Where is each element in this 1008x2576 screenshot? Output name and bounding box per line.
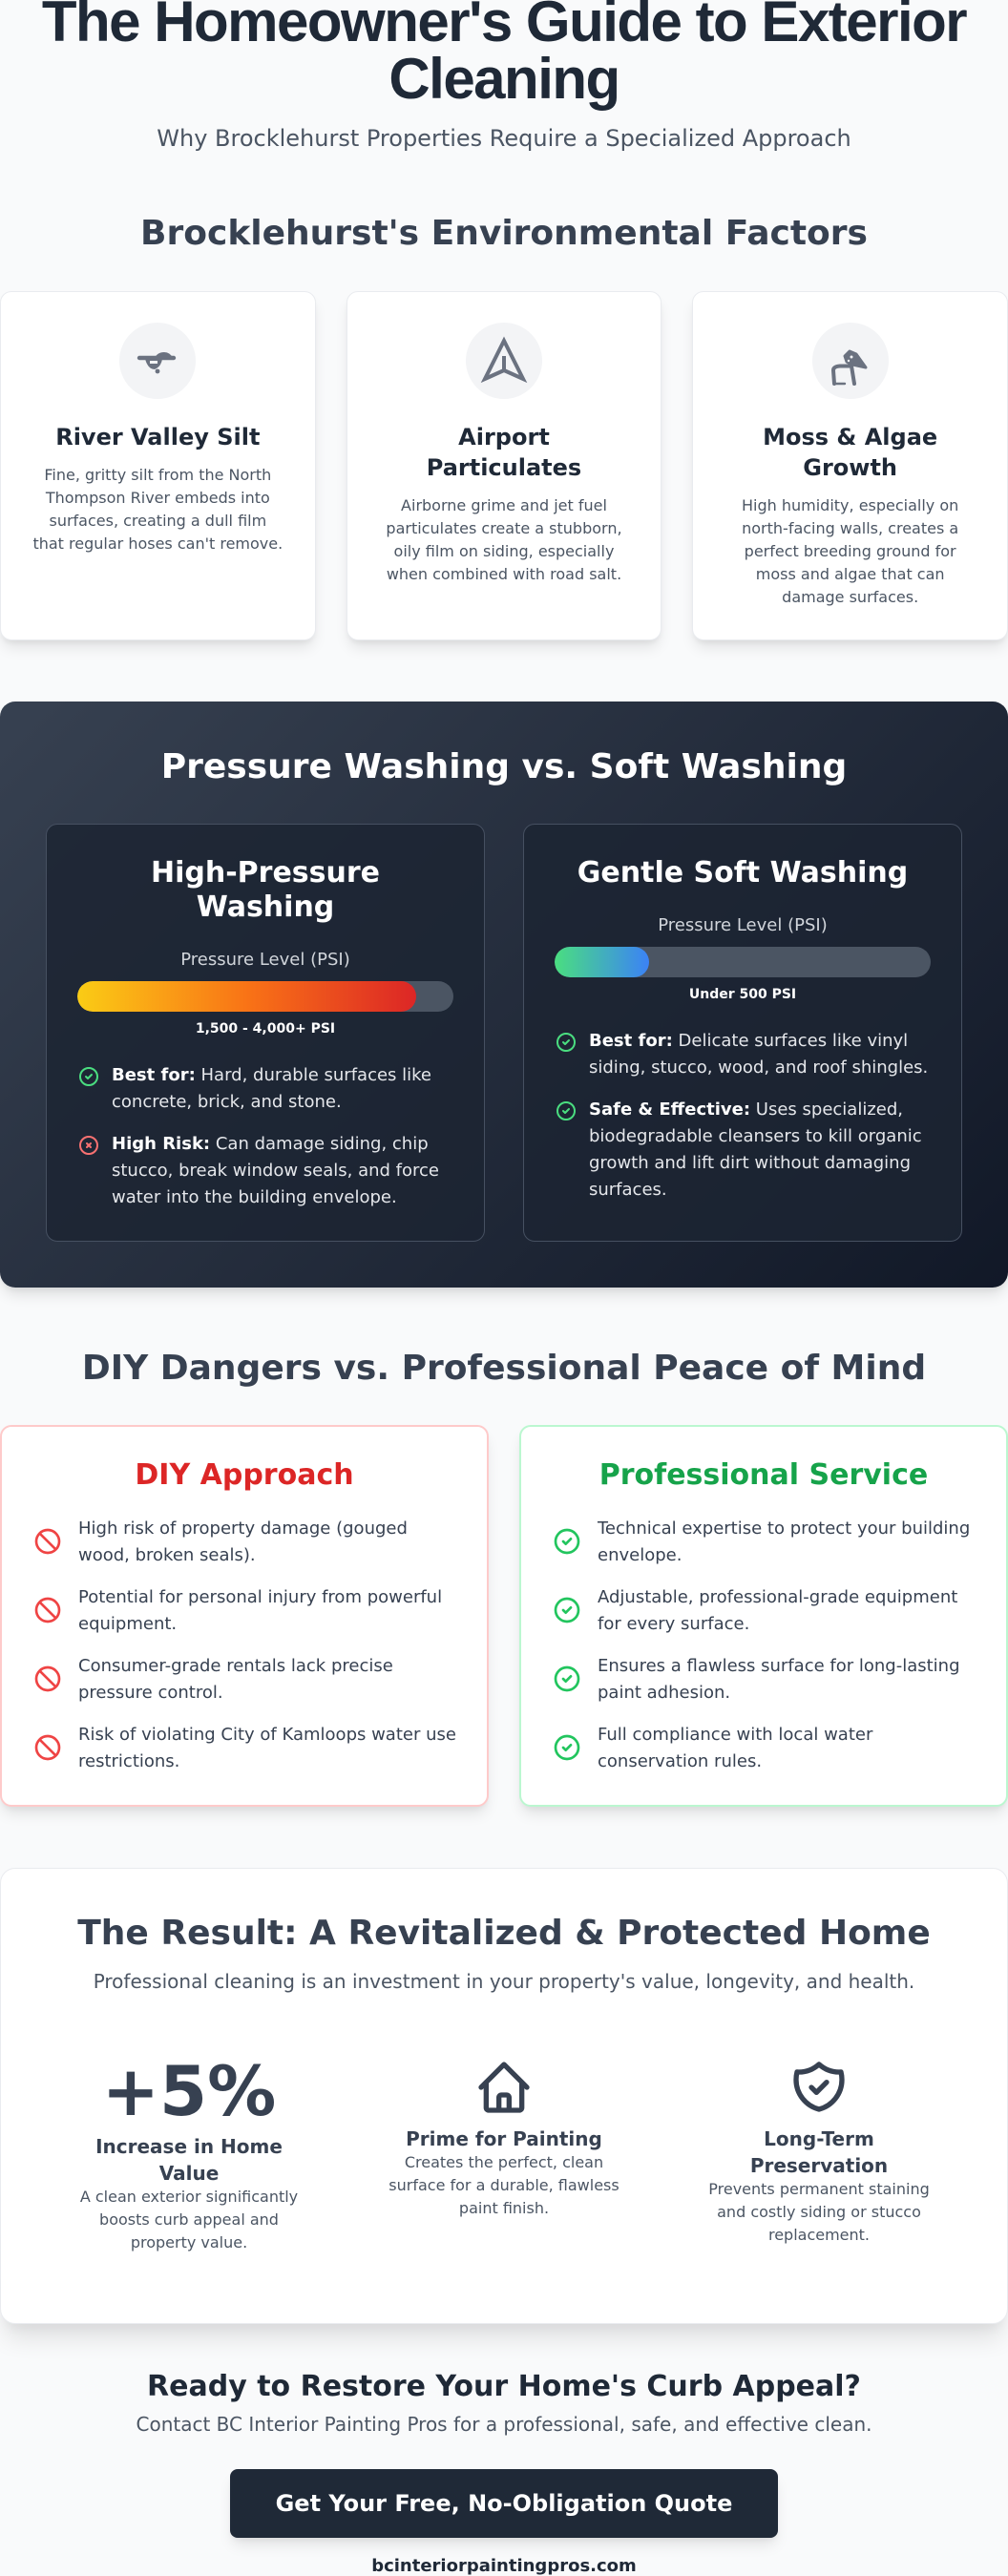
list item: high risk: water into the building envelope. — [112, 1187, 397, 1207]
list item: best for — [556, 1031, 928, 1078]
list item: Technical expertise to protect your building — [598, 1518, 970, 1539]
list item: envelope. — [598, 1545, 682, 1565]
list item: conservation rules. — [598, 1751, 762, 1771]
list item — [34, 1587, 442, 1634]
stat: long-term preservation — [708, 2062, 930, 2244]
card text — [386, 496, 622, 583]
list item: high risk: High Risk: Can damage siding, chip — [112, 1134, 429, 1154]
gauge label: Pressure Level (PSI) — [658, 915, 828, 935]
website: bcinteriorpaintingpros.com — [371, 2556, 637, 2576]
card heading: River Valley Silt — [55, 424, 260, 450]
call to action heading: Ready to Restore Your Home's Curb Appeal? — [147, 2370, 861, 2403]
card text: north-facing walls, creates a — [742, 519, 958, 537]
stat title: Long-Term — [764, 2127, 874, 2150]
card text: moss and algae that can — [756, 565, 945, 583]
list item: equipment. — [78, 1614, 177, 1634]
heading: environmental factors: Brocklehurst's Environmental Factors — [140, 214, 868, 253]
card text — [742, 496, 958, 606]
list item — [554, 1518, 970, 1565]
stat text: replacement. — [768, 2226, 870, 2244]
list item: best for: concrete, brick, and stone. — [112, 1092, 342, 1112]
list item: best for: siding, stucco, wood, and roof shingles. — [589, 1058, 928, 1078]
list item: Ensures a flawless surface for long-lasting — [598, 1656, 960, 1676]
list item: Consumer-grade rentals lack precise — [78, 1656, 393, 1676]
list item: safe and effective: Safe & Effective: Uses specialized, — [589, 1100, 903, 1120]
panel: pressure vs soft washing — [0, 702, 1008, 1288]
stat title: Value — [159, 2162, 219, 2185]
icon: shield check — [793, 2062, 845, 2112]
stat title: Increase in Home — [95, 2135, 283, 2158]
stat text: property value. — [131, 2233, 247, 2251]
card heading — [763, 424, 937, 481]
card text: when combined with road salt. — [387, 565, 621, 583]
panel heading: High-Pressure — [151, 856, 380, 890]
stat text: paint finish. — [459, 2199, 549, 2217]
list item: Risk of violating City of Kamloops water use — [78, 1725, 456, 1745]
panel: gentle soft washing — [523, 824, 962, 1242]
heading: The Result: A Revitalized & Protected Home — [77, 1914, 931, 1953]
stat text — [388, 2153, 620, 2217]
stat text: A clean exterior significantly — [80, 2188, 298, 2206]
list item: safe and effective: biodegradable cleansers to kill organic — [589, 1126, 922, 1146]
heading: DIY vs professional: DIY Dangers vs. Professional Peace of Mind — [82, 1349, 926, 1388]
card text: Fine, gritty silt from the North — [44, 466, 271, 484]
panel: professional service — [519, 1425, 1008, 1807]
list item: for every surface. — [598, 1614, 749, 1634]
icon: navigation arrow — [466, 323, 542, 399]
card text: surfaces, creating a dull film — [49, 512, 266, 530]
list item — [34, 1518, 408, 1565]
list item: Potential for personal injury from powerful — [78, 1587, 442, 1607]
list item: safe and effective: growth and lift dirt without damaging — [589, 1153, 911, 1173]
gauge label: Pressure Level (PSI) — [180, 950, 350, 970]
list item: high risk: stucco, break window seals, and force — [112, 1161, 439, 1181]
heading: Pressure Washing vs. Soft Washing — [161, 747, 847, 786]
title: Cleaning — [388, 47, 620, 111]
stat title: Preservation — [750, 2154, 888, 2177]
button: free quote: Get Your Free, No-Obligation Quote — [276, 2490, 732, 2517]
list item: best for: Best for: Delicate surfaces like vinyl — [589, 1031, 908, 1051]
stat text: Prevents permanent staining — [708, 2180, 930, 2198]
stat text: and costly siding or stucco — [717, 2203, 921, 2221]
call to action text: Contact BC Interior Painting Pros for a professional, safe, and effective clean. — [136, 2413, 872, 2436]
stat text — [708, 2180, 930, 2244]
panel: the result — [0, 1868, 1008, 2324]
card text — [32, 466, 283, 553]
card heading: Airport — [458, 424, 550, 450]
icon: house — [478, 2062, 530, 2113]
card text: Airborne grime and jet fuel — [401, 496, 607, 514]
list item: restrictions. — [78, 1751, 179, 1771]
panel heading: DIY Approach — [135, 1458, 354, 1492]
gauge value: 1,500 - 4,000+ PSI — [196, 1021, 335, 1037]
list item: paint adhesion. — [598, 1683, 730, 1703]
panel heading — [151, 856, 380, 924]
stat title — [95, 2135, 283, 2185]
card heading: Particulates — [427, 454, 581, 481]
stat title: Prime for Painting — [406, 2127, 602, 2150]
card text: that regular hoses can't remove. — [32, 534, 283, 553]
panel heading: Professional Service — [599, 1458, 928, 1492]
stat text — [80, 2188, 298, 2251]
card text: oily film on siding, especially — [394, 542, 614, 560]
list item: best for: Best for: Hard, durable surfaces like — [112, 1065, 431, 1085]
intro text: Professional cleaning is an investment in your property's value, longevity, and health. — [94, 1970, 914, 1993]
list item — [554, 1656, 960, 1703]
list item: high risk — [79, 1134, 439, 1207]
card text: Thompson River embeds into — [46, 489, 270, 507]
list item: safe and effective: surfaces. — [589, 1180, 667, 1200]
list item: High risk of property damage (gouged — [78, 1518, 408, 1539]
list item: safe and effective — [556, 1100, 922, 1200]
button: free quote — [230, 2469, 778, 2538]
list item — [554, 1587, 957, 1634]
list item: Adjustable, professional-grade equipment — [598, 1587, 957, 1607]
subtitle: Why Brocklehurst Properties Require a Specialized Approach — [157, 125, 851, 152]
stat: home value — [80, 2051, 298, 2251]
list item — [34, 1725, 456, 1771]
card text: particulates create a stubborn, — [386, 519, 622, 537]
stat text: Creates the perfect, clean — [405, 2153, 603, 2171]
big number: +5% — [102, 2051, 276, 2131]
panel heading: Gentle Soft Washing — [578, 856, 908, 890]
panel heading: Washing — [197, 890, 334, 924]
gauge value: Under 500 PSI — [689, 987, 796, 1002]
panel: airport particulates — [346, 291, 662, 640]
title — [42, 0, 967, 111]
panel: moss and algae — [692, 291, 1008, 640]
panel: high-pressure washing — [46, 824, 485, 1242]
card heading: Growth — [803, 454, 897, 481]
panel: DIY approach — [0, 1425, 489, 1807]
gauge: high pressure — [77, 981, 453, 1012]
card heading — [427, 424, 581, 481]
icon: moss — [812, 323, 889, 399]
icon: silt — [119, 323, 196, 399]
list item: wood, broken seals). — [78, 1545, 256, 1565]
stat text: boosts curb appeal and — [99, 2210, 279, 2229]
list item — [34, 1656, 393, 1703]
list item: Full compliance with local water — [598, 1725, 872, 1745]
card text: damage surfaces. — [782, 588, 918, 606]
card heading: Moss & Algae — [763, 424, 937, 450]
list item: best for — [79, 1065, 431, 1112]
stat text: surface for a durable, flawless — [388, 2176, 620, 2194]
stat title — [750, 2127, 888, 2177]
list item — [554, 1725, 872, 1771]
panel: river valley silt — [0, 291, 316, 640]
gauge: soft wash — [555, 947, 931, 977]
list item: pressure control. — [78, 1683, 223, 1703]
stat: prime for painting — [388, 2062, 620, 2217]
card text: perfect breeding ground for — [745, 542, 956, 560]
card text: High humidity, especially on — [742, 496, 958, 514]
